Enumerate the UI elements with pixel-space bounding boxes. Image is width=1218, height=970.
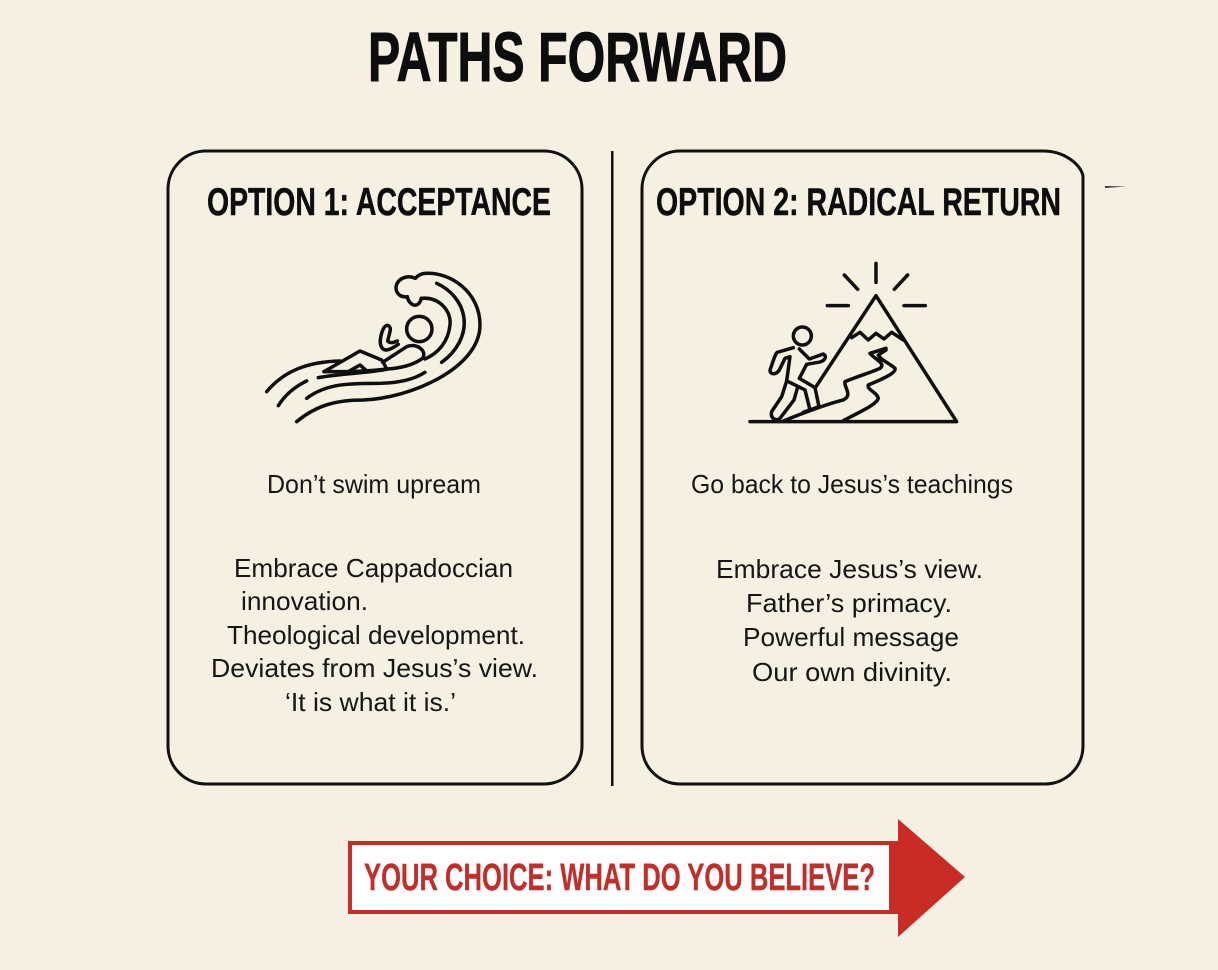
description: option 2: Father’s primacy. <box>746 588 952 618</box>
description: option 2: Powerful message <box>743 622 959 652</box>
description: option 2: Embrace Jesus’s view. <box>716 554 983 584</box>
subtitle: option 2: Go back to Jesus’s teachings <box>691 469 1013 499</box>
center divider <box>611 151 614 786</box>
arrow text: YOUR CHOICE: WHAT DO YOU BELIEVE? <box>364 857 875 899</box>
description: option 2: Our own divinity. <box>752 657 952 687</box>
panel: option 1 acceptance <box>168 151 582 784</box>
description: option 1: ‘It is what it is.’ <box>285 687 456 717</box>
heading: option 2: OPTION 2: RADICAL RETURN <box>656 181 1061 224</box>
panel: option 2 radical return <box>642 151 1083 784</box>
description: option 1 <box>211 553 538 717</box>
stray mark <box>1105 186 1126 188</box>
icon: person riding wave <box>267 273 480 422</box>
description: option 1: innovation. <box>241 586 368 616</box>
heading: option 1: OPTION 1: ACCEPTANCE <box>207 181 551 224</box>
description: option 1: Deviates from Jesus’s view. <box>211 653 538 683</box>
description: option 1: Theological development. <box>227 620 525 650</box>
title: PATHS FORWARD <box>368 18 787 96</box>
icon: person climbing mountain <box>750 263 957 422</box>
description: option 2 <box>716 554 983 687</box>
panel frame <box>642 151 1083 784</box>
callout arrow: your choice <box>348 819 965 937</box>
arrow white box <box>352 845 889 910</box>
arrow shape <box>348 819 965 937</box>
panel frame <box>168 151 582 784</box>
subtitle: option 1: Don’t swim upream <box>267 469 481 499</box>
description: option 1: Embrace Cappadoccian <box>234 553 513 583</box>
